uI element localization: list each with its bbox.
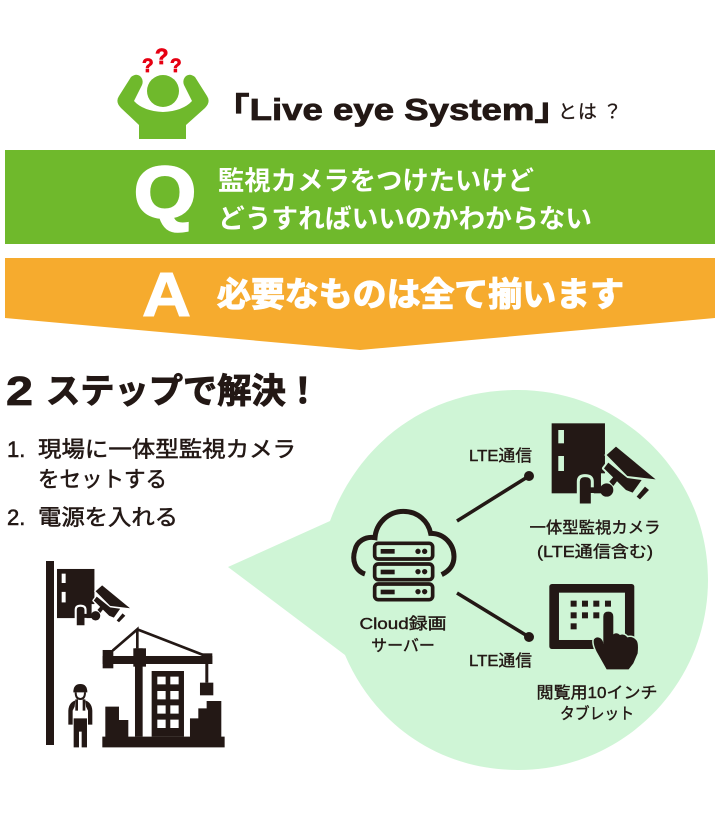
steps list: 電源を入れる xyxy=(38,505,178,530)
label: camera xyxy=(530,519,660,561)
label: LTE upper: LTE通信 xyxy=(469,447,532,465)
icon: confused person: ? xyxy=(170,56,182,77)
label: cloud server: サーバー xyxy=(371,638,435,655)
label: cloud server: Cloud録画 xyxy=(360,615,446,633)
label: LTE lower: LTE通信 xyxy=(469,652,532,670)
steps list: 現場に一体型監視カメラ xyxy=(38,437,296,462)
panel: answer arrow xyxy=(5,258,715,350)
answer text: 必要なものは全て揃います xyxy=(217,267,624,316)
heading: two steps: 2 xyxy=(6,368,33,414)
question text: どうすればいいのかわからない xyxy=(218,197,592,236)
heading: two steps: ステップで解決！ xyxy=(46,363,320,413)
panel: question xyxy=(5,150,715,244)
crane xyxy=(103,629,213,737)
icon: integrated camera xyxy=(552,423,656,505)
building xyxy=(152,671,184,737)
icon: tablet with hand xyxy=(549,584,638,669)
label: tablet xyxy=(536,684,658,723)
question text: 監視カメラをつけたいけど xyxy=(218,159,534,198)
icon: construction site xyxy=(68,629,225,747)
skyline xyxy=(102,701,225,747)
steps list: をセットする xyxy=(38,467,167,492)
label: cloud server xyxy=(360,615,446,655)
steps list: 1. xyxy=(7,437,25,462)
icon: pole with camera xyxy=(46,561,130,745)
connector: server to tablet xyxy=(457,593,534,642)
title: 「Live eye System」 xyxy=(213,92,571,127)
label: tablet: 閲覧用10インチ xyxy=(536,684,658,702)
label: tablet: タブレット xyxy=(560,704,634,723)
worker xyxy=(68,684,92,747)
icon: cloud server xyxy=(354,511,454,600)
steps list: 2. xyxy=(7,505,25,530)
steps list xyxy=(7,437,296,530)
title: とは ？ xyxy=(558,97,622,124)
label: camera: 一体型監視カメラ xyxy=(530,519,660,537)
connector: server to camera xyxy=(457,471,534,521)
speech bubble xyxy=(228,390,708,770)
question text xyxy=(218,159,592,236)
label: camera: (LTE通信含む) xyxy=(537,543,653,561)
icon: confused person: ? xyxy=(155,44,168,69)
A letter: A xyxy=(142,261,191,330)
icon: confused person xyxy=(117,44,209,139)
icon: confused person: ? xyxy=(142,56,154,77)
Q letter: Q xyxy=(134,153,196,233)
